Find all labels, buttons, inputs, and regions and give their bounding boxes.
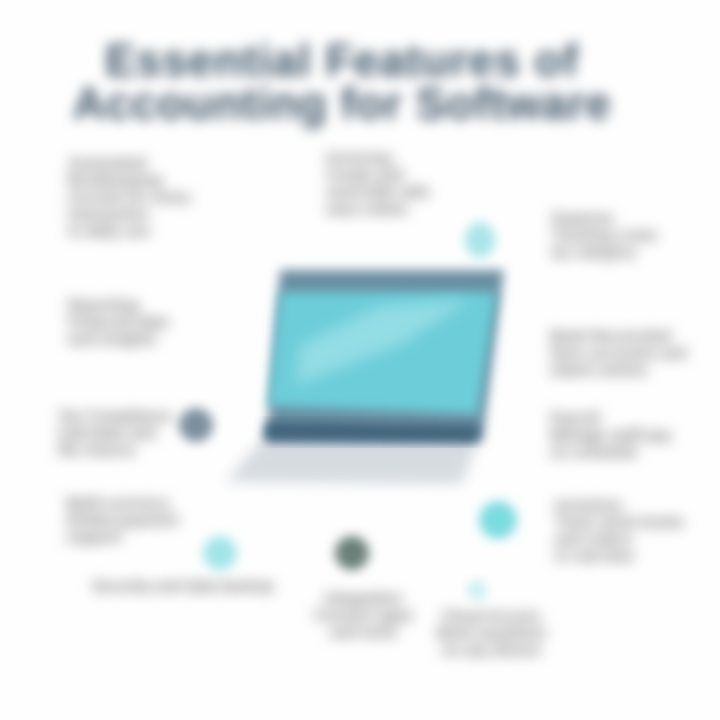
text block: middle right: match entries (550, 362, 648, 379)
text block: upper right: by category (552, 244, 636, 261)
text block: middle right: Sync accounts and (550, 345, 687, 362)
laptop (225, 270, 504, 484)
text block: lower left (52, 404, 176, 464)
text block: bottom right: Cloud Access (442, 608, 541, 625)
laptop frame (266, 270, 504, 442)
text block: bottom centre (310, 586, 418, 646)
text block: left bottom: Multi-currency (66, 495, 169, 512)
icon: teal circle lower left (203, 536, 237, 570)
text block: right bottom: and orders (555, 531, 633, 548)
icon: teal badge top right (465, 222, 495, 258)
icon: teal circle right (479, 501, 517, 539)
text block: top centre: Invoicing (326, 150, 392, 167)
text block: lower right (544, 406, 676, 466)
text block: top left: records for every (68, 189, 191, 206)
text block: top left: Bookkeeping (68, 172, 162, 189)
text block: middle left: and insights (68, 331, 156, 348)
text block: lower left: Tax Compliance (58, 408, 172, 425)
title: Essential Features of (105, 35, 579, 86)
text block: left bottom: support (66, 529, 122, 546)
text block: lower right: on schedule (550, 444, 638, 461)
laptop base (225, 440, 478, 484)
text block: middle left: Financial data (68, 314, 168, 331)
text block: upper right: Expense (552, 210, 614, 227)
text block: left bottom: Global payment (66, 512, 179, 529)
laptop lower bezel (264, 422, 480, 442)
text block: top centre: Create and (326, 167, 404, 184)
text block: lower left: file returns (58, 442, 136, 459)
text block: lower left: Calculate and (58, 425, 156, 442)
text block: right bottom (549, 493, 688, 570)
text block: bottom centre: Connect apps (314, 607, 413, 624)
text block: top centre (320, 146, 434, 222)
icon: small teal bottom right (467, 580, 487, 600)
title (66, 34, 618, 138)
text block: top left: Automated (68, 155, 146, 172)
text block: bottom right: Work anywhere (436, 625, 547, 642)
text block: top left: transaction (68, 206, 149, 223)
text block: left bottom (60, 490, 184, 552)
text block: upper right (546, 206, 662, 267)
text block: right bottom: in real time (555, 548, 634, 565)
text block: middle right (544, 324, 692, 384)
text block: middle left (62, 292, 174, 354)
text block: bottom centre: and tools (330, 624, 397, 641)
text block: top centre: send bills with (326, 184, 429, 201)
text block: lower right: Manage staff pay (550, 427, 672, 444)
text block: middle left: Reporting (68, 297, 139, 314)
text block: bottom right: on any device (442, 642, 541, 659)
text block: lower right: Payroll (550, 410, 600, 427)
icon: grey circle left (179, 408, 213, 442)
text block: bottom right (430, 604, 552, 664)
text block: right bottom: Track stock levels (555, 514, 683, 531)
text block: right bottom: Inventory (555, 497, 623, 514)
text block: top left (61, 151, 196, 245)
title: Accounting for Software (73, 78, 611, 129)
text block: top centre: ease online (326, 201, 408, 218)
text block: upper right: Tracking costs (552, 227, 657, 244)
text block: bottom centre: Integration (325, 590, 402, 607)
text block: middle right: Bank Reconciled (550, 328, 671, 345)
icon: dark circle bottom (335, 536, 369, 570)
text block: top left: in daily use (68, 223, 150, 240)
laptop screen (268, 292, 496, 414)
screen highlight (296, 300, 470, 385)
text block: bottom left: Security and data backup (92, 578, 274, 595)
